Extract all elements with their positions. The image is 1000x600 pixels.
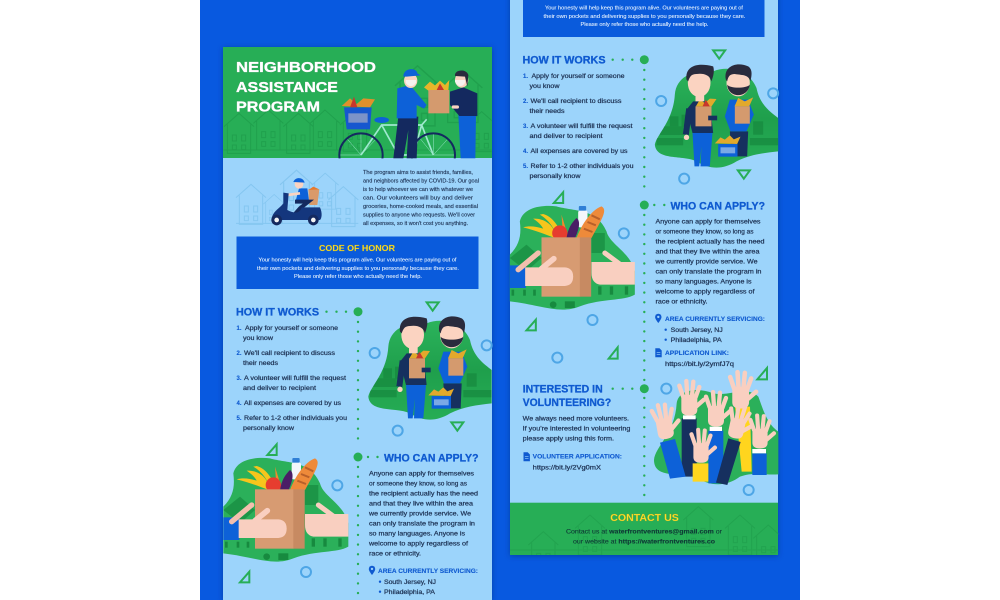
how it works list: 1. bbox=[523, 74, 528, 80]
volunteer application link bbox=[524, 452, 622, 472]
who can apply text bbox=[368, 470, 479, 558]
extra decorative shapes bbox=[552, 347, 767, 495]
code of honor box: Your honesty will help keep this program alive. Our volunteers are paying out of bbox=[258, 258, 457, 264]
how it works list: personally know bbox=[530, 173, 581, 180]
volunteer application link: VOLUNTEER APPLICATION: bbox=[533, 454, 622, 460]
heading: interested in volunteering: INTERESTED IN bbox=[523, 384, 603, 396]
who can apply text: race or ethnicity. bbox=[656, 298, 708, 306]
heading: how it works: HOW IT WORKS bbox=[236, 306, 319, 318]
title: NEIGHBORHOOD bbox=[236, 60, 376, 76]
code of honor box continued: Please only refer those who actually need the help. bbox=[580, 22, 708, 28]
title: ASSISTANCE bbox=[236, 80, 338, 96]
volunteering text bbox=[523, 416, 631, 442]
how it works list: Refer to 1-2 other individuals you bbox=[530, 163, 634, 170]
who can apply text: race or ethnicity. bbox=[369, 550, 421, 558]
area currently servicing: AREA CURRENTLY SERVICING: bbox=[378, 569, 478, 575]
how it works list: 5. bbox=[236, 416, 242, 422]
who can apply text: welcome to apply regardless of bbox=[654, 288, 755, 296]
who can apply text: or someone they know, so long as bbox=[656, 228, 754, 236]
who can apply text: the recipient actually has the need bbox=[369, 490, 479, 498]
how it works list: you know bbox=[243, 335, 274, 342]
illustration: two men with groceries bbox=[655, 64, 778, 168]
title: PROGRAM bbox=[236, 100, 320, 116]
how it works list: Apply for yourself or someone bbox=[245, 325, 339, 332]
intro text: supplies to anyone who requests. We'll cover bbox=[363, 212, 475, 218]
who can apply text: welcome to apply regardless of bbox=[368, 540, 468, 548]
code of honor box: CODE OF HONOR bbox=[319, 243, 395, 253]
volunteering text: We always need more volunteers. bbox=[523, 416, 629, 422]
heading: interested in volunteering bbox=[523, 384, 611, 409]
who can apply text: and that they live within the area bbox=[656, 248, 760, 256]
intro text: The program aims to assist friends, families, bbox=[363, 170, 473, 176]
who can apply text: so many languages. Anyone is bbox=[656, 278, 752, 286]
how it works list: 5. bbox=[523, 164, 528, 170]
intro text: groceries, home-cooked meals, and essential bbox=[363, 204, 478, 210]
area currently servicing: Philadelphia, PA bbox=[384, 589, 436, 596]
timeline dots bbox=[325, 307, 379, 600]
heading: who can apply: WHO CAN APPLY? bbox=[384, 452, 478, 464]
how it works list: Apply for yourself or someone bbox=[532, 73, 625, 80]
volunteering text: please apply using this form. bbox=[523, 436, 614, 442]
how it works list bbox=[523, 73, 634, 180]
code of honor box bbox=[236, 236, 478, 289]
contact footer: our website at https://waterfrontventures.co bbox=[573, 538, 715, 546]
how it works list: 3. bbox=[523, 124, 528, 130]
area currently servicing: South Jersey, NJ bbox=[671, 327, 723, 334]
heading: how it works: HOW IT WORKS bbox=[522, 54, 606, 66]
decorative circles and triangles bbox=[240, 302, 492, 582]
how it works list: All expenses are covered by us bbox=[244, 400, 341, 407]
intro text: can. Our volunteers will buy and deliver bbox=[363, 196, 473, 202]
volunteering text: If you're interested in volunteering bbox=[523, 426, 631, 432]
volunteer application link: https://bit.ly/2Vg0mX bbox=[533, 464, 601, 472]
how it works list: 4. bbox=[523, 149, 528, 155]
who can apply text: we currently provide service. We bbox=[368, 510, 472, 518]
how it works list bbox=[236, 325, 348, 432]
intro text bbox=[363, 170, 479, 227]
area currently servicing: Philadelphia, PA bbox=[671, 337, 723, 344]
who can apply text: can only translate the program in bbox=[369, 520, 476, 528]
illustration: raised hands bbox=[651, 372, 778, 485]
how it works list: their needs bbox=[243, 360, 278, 367]
who can apply text: Anyone can apply for themselves bbox=[656, 218, 760, 226]
how it works list: personally know bbox=[243, 425, 295, 432]
area currently servicing bbox=[655, 314, 765, 344]
heading: who can apply: WHO CAN APPLY? bbox=[670, 200, 765, 212]
intro text: and neighbors affected by COVID-19. Our goal bbox=[363, 178, 479, 184]
area currently servicing bbox=[369, 566, 478, 596]
application link bbox=[655, 348, 735, 368]
panel: left page bbox=[223, 47, 497, 600]
who can apply text: or someone they know, so long as bbox=[369, 480, 467, 488]
how it works list: We'll call recipient to discuss bbox=[244, 350, 335, 357]
contact footer bbox=[510, 502, 778, 555]
title bbox=[236, 60, 376, 116]
code of honor box: Please only refer those who actually need the help. bbox=[294, 274, 422, 280]
who can apply text: so many languages. Anyone is bbox=[369, 530, 465, 538]
how it works list: their needs bbox=[530, 108, 564, 115]
who can apply text: the recipient actually has the need bbox=[656, 238, 765, 246]
header banner bbox=[223, 47, 492, 158]
who can apply text: and that they live within the area bbox=[369, 500, 474, 508]
who can apply text: can only translate the program in bbox=[656, 268, 762, 276]
how it works list: 2. bbox=[236, 351, 242, 357]
how it works list: A volunteer will fulfill the request bbox=[244, 375, 346, 382]
how it works list: and deliver to recipient bbox=[530, 133, 603, 140]
intro text: is to help whoever we can with whatever we bbox=[363, 187, 473, 193]
how it works list: and deliver to recipient bbox=[243, 385, 316, 392]
application link: https://bit.ly/2ymfJ7q bbox=[665, 361, 735, 368]
timeline dots bbox=[612, 55, 666, 496]
how it works list: 3. bbox=[236, 376, 242, 382]
panel: right page bbox=[510, 0, 783, 572]
heading: interested in volunteering: VOLUNTEERING? bbox=[523, 397, 611, 409]
header illustration: delivery by bicycle bbox=[223, 66, 497, 177]
who can apply text: Anyone can apply for themselves bbox=[369, 470, 474, 478]
area currently servicing: AREA CURRENTLY SERVICING: bbox=[665, 317, 765, 323]
decorative circles and triangles bbox=[526, 50, 778, 330]
how it works list: 2. bbox=[523, 99, 528, 105]
who can apply text bbox=[654, 218, 765, 306]
how it works list: 1. bbox=[236, 326, 242, 332]
how it works list: We'll call recipient to discuss bbox=[530, 98, 622, 105]
illustration: bag of groceries bbox=[223, 458, 348, 562]
contact footer: Contact us at waterfrontventures@gmail.com or bbox=[566, 528, 722, 536]
footer town pattern bbox=[510, 507, 783, 572]
who can apply text: we currently provide service. We bbox=[654, 258, 758, 266]
how it works list: you know bbox=[530, 83, 560, 90]
application link: APPLICATION LINK: bbox=[665, 351, 729, 357]
illustration: bag of groceries bbox=[510, 206, 635, 310]
code of honor box: their own pockets and delivering supplies to you personally because they care. bbox=[257, 266, 459, 272]
illustration: two men with groceries bbox=[368, 316, 492, 420]
how it works list: A volunteer will fulfill the request bbox=[530, 123, 633, 130]
code of honor box continued: Your honesty will help keep this program alive. Our volunteers are paying out of bbox=[545, 6, 744, 12]
how it works list: Refer to 1-2 other individuals you bbox=[244, 415, 348, 422]
illustration: scooter in town bbox=[236, 170, 358, 227]
code of honor box continued bbox=[523, 0, 764, 37]
how it works list: All expenses are covered by us bbox=[530, 148, 628, 155]
area currently servicing: South Jersey, NJ bbox=[384, 579, 436, 586]
intro text: all expenses, so it won't cost you anything. bbox=[363, 221, 468, 227]
code of honor box continued: their own pockets and delivering supplies to you personally because they care. bbox=[544, 14, 746, 20]
contact footer: CONTACT US bbox=[610, 513, 679, 524]
how it works list: 4. bbox=[236, 401, 242, 407]
blue backdrop bbox=[200, 0, 800, 600]
